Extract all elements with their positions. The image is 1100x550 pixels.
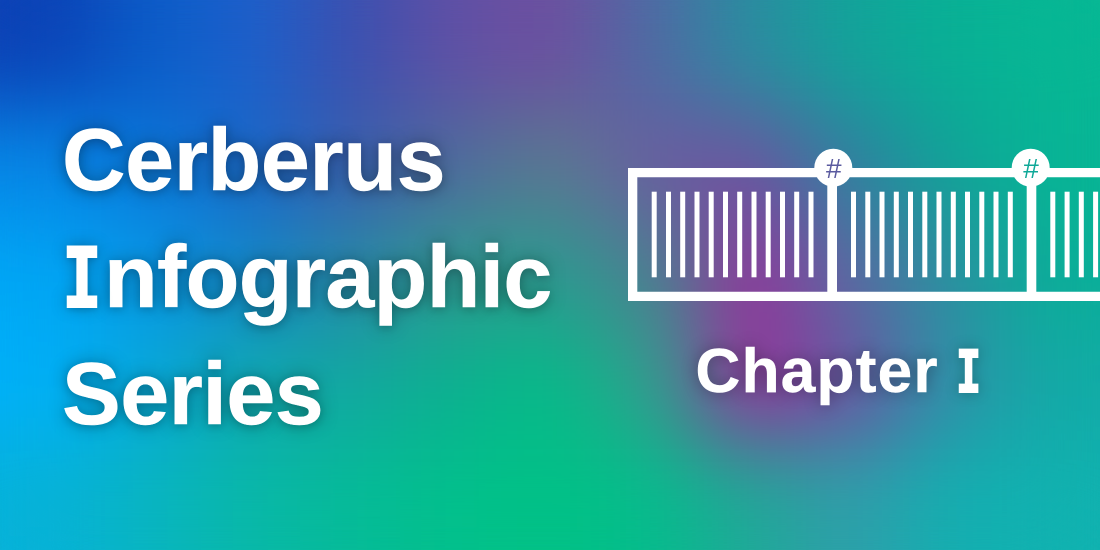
title line: Cerberus: Cerberus [62, 110, 445, 208]
title line: Series: Series [62, 344, 323, 442]
chapter label: I [956, 338, 982, 406]
title line: Infographic: I [62, 230, 102, 326]
badge: hash 2: # [1023, 153, 1039, 184]
strip frame [628, 168, 1100, 301]
title [56, 110, 554, 442]
badge: hash 1 [814, 149, 852, 187]
segment 2 bars [851, 192, 1013, 277]
chapter label: Chapter [696, 336, 939, 406]
badge: hash 1: # [826, 153, 842, 184]
title line: Infographic: nfographic [104, 226, 552, 326]
segment 1 bars [652, 192, 814, 277]
badge: hash 2 [1012, 149, 1050, 187]
segment 3 bars [1050, 192, 1098, 277]
